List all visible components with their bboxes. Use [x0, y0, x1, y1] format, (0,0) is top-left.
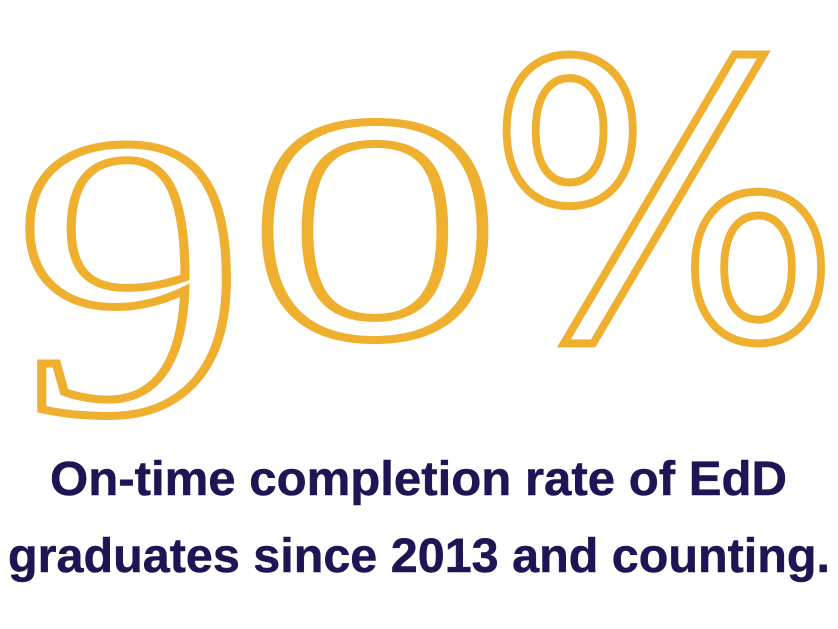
big statistic: 90%: 0	[250, 58, 500, 403]
big statistic: 90%	[15, 0, 838, 500]
caption: graduates since 2013 and counting.	[8, 530, 830, 583]
caption: On-time completion rate of EdD	[50, 453, 787, 506]
caption	[8, 453, 830, 583]
big statistic: 90%: 9	[15, 52, 245, 500]
